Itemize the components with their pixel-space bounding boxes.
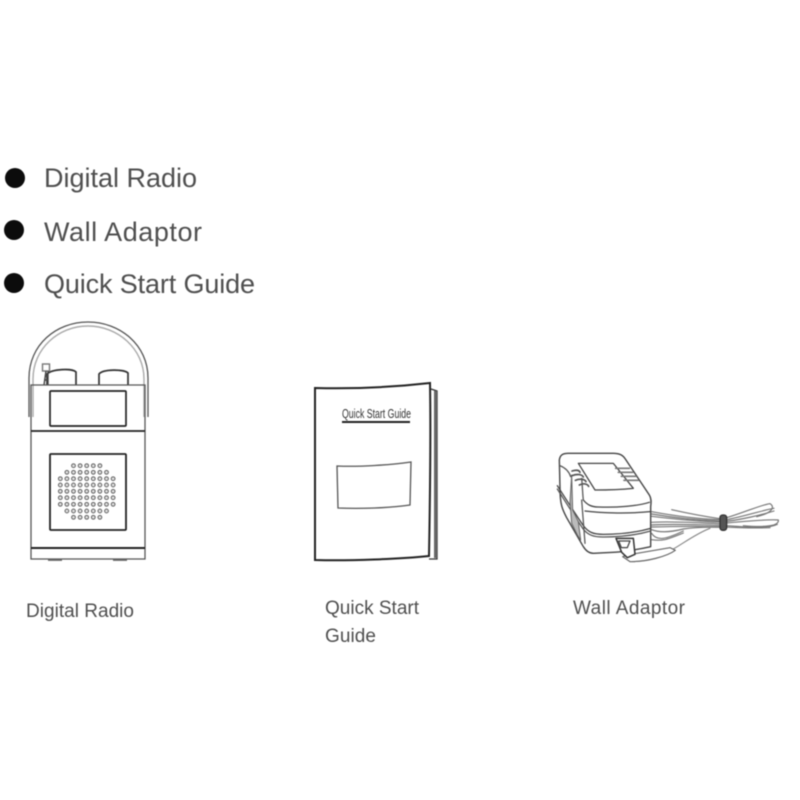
icon: wall adaptor xyxy=(557,453,778,562)
adaptor top plate xyxy=(578,463,633,490)
bullet list xyxy=(4,163,255,299)
adaptor front face lines xyxy=(583,500,649,507)
radio body xyxy=(31,385,145,559)
label: Quick Start Guide: Quick Start xyxy=(325,598,420,619)
cord tie xyxy=(720,515,727,530)
bullet: Quick Start Guide: Quick Start Guide xyxy=(44,269,255,299)
adaptor side grey band xyxy=(570,475,581,540)
icon: digital radio xyxy=(29,322,148,560)
adaptor plug socket xyxy=(616,538,635,558)
label: Wall Adaptor: Wall Adaptor xyxy=(573,598,686,619)
label: Digital Radio: Digital Radio xyxy=(26,601,134,622)
label: Quick Start Guide xyxy=(325,598,420,647)
booklet picture frame xyxy=(337,462,411,508)
adaptor plug tube xyxy=(623,548,675,562)
adaptor shoulder line xyxy=(560,466,585,543)
booklet back pages xyxy=(429,389,437,559)
radio handle xyxy=(29,322,148,417)
radio display xyxy=(50,391,126,426)
booklet page edge shading xyxy=(434,391,437,558)
adaptor cord bundle xyxy=(623,504,778,562)
speaker grille xyxy=(58,464,115,519)
radio knobs and antenna xyxy=(42,364,128,385)
label: Quick Start Guide: Guide xyxy=(325,626,376,647)
adaptor vents xyxy=(616,468,638,480)
booklet title underline xyxy=(342,421,410,423)
radio feet xyxy=(48,559,127,561)
adaptor strap lines xyxy=(557,486,651,534)
adaptor body xyxy=(559,453,651,553)
booklet cover xyxy=(315,383,430,560)
bullet: Wall Adaptor: Wall Adaptor xyxy=(44,217,202,247)
bullet: Digital Radio: Digital Radio xyxy=(44,163,197,193)
booklet title: Quick Start Guide xyxy=(342,406,411,421)
radio speaker panel xyxy=(50,454,126,530)
icon: quick start guide booklet xyxy=(315,383,437,560)
